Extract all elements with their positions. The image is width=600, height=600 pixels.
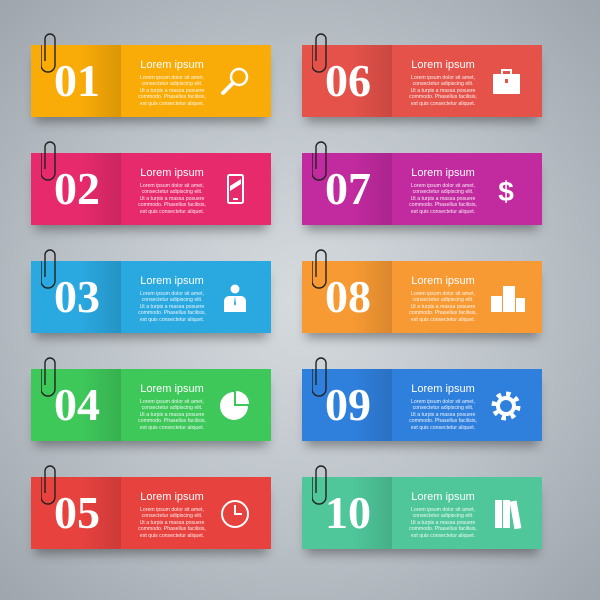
number 06: 06: [325, 55, 371, 106]
title: Lorem ipsum: [411, 383, 475, 395]
body text: Ut a turpis a massa posuere: [140, 520, 204, 526]
title: Lorem ipsum: [140, 167, 204, 179]
number 08: 08: [325, 271, 371, 322]
paperclip: [41, 465, 56, 505]
icon: clock: [221, 500, 249, 528]
title: Lorem ipsum: [411, 491, 475, 503]
body text: Lorem ipsum dolor sit amet,: [140, 183, 204, 189]
body text: Ut a turpis a massa posuere: [140, 304, 204, 310]
body text: est quis consectetur aliquet.: [140, 533, 204, 539]
card 10: [302, 477, 542, 549]
body text: consectetur adipiscing elit.: [142, 189, 202, 195]
body text: consectetur adipiscing elit.: [142, 81, 202, 87]
body text: consectetur adipiscing elit.: [142, 513, 202, 519]
icon: buildings: [491, 286, 525, 312]
title: Lorem ipsum: [411, 59, 475, 71]
body text: [409, 507, 477, 539]
body text: est quis consectetur aliquet.: [140, 101, 204, 107]
title: Lorem ipsum: [140, 59, 204, 71]
body text: commodo. Phasellus facilisis,: [138, 310, 206, 316]
number 01: 01: [54, 55, 100, 106]
paperclip: [41, 357, 56, 397]
body text: Lorem ipsum dolor sit amet,: [411, 75, 475, 81]
body text: Ut a turpis a massa posuere: [411, 88, 475, 94]
paperclip: [312, 33, 327, 73]
number 02: 02: [54, 163, 100, 214]
body text: commodo. Phasellus facilisis,: [138, 526, 206, 532]
icon: pie chart: [220, 391, 249, 420]
icon: magnifier: [220, 68, 248, 96]
body text: Ut a turpis a massa posuere: [411, 196, 475, 202]
title: Lorem ipsum: [411, 275, 475, 287]
paperclip: [312, 249, 327, 289]
card 02: [31, 153, 271, 225]
body text: commodo. Phasellus facilisis,: [409, 526, 477, 532]
body text: Lorem ipsum dolor sit amet,: [140, 291, 204, 297]
body text: [409, 75, 477, 107]
body text: commodo. Phasellus facilisis,: [409, 310, 477, 316]
card 04: [31, 369, 271, 441]
body text: commodo. Phasellus facilisis,: [138, 202, 206, 208]
body text: consectetur adipiscing elit.: [413, 189, 473, 195]
body text: est quis consectetur aliquet.: [140, 209, 204, 215]
body text: Ut a turpis a massa posuere: [140, 412, 204, 418]
body text: consectetur adipiscing elit.: [142, 405, 202, 411]
title: Lorem ipsum: [140, 491, 204, 503]
body text: est quis consectetur aliquet.: [411, 209, 475, 215]
body text: consectetur adipiscing elit.: [413, 513, 473, 519]
paperclip: [312, 357, 327, 397]
body text: [409, 183, 477, 215]
icon: gear: [492, 392, 520, 420]
paperclip: [41, 141, 56, 181]
paperclip: [312, 141, 327, 181]
body text: commodo. Phasellus facilisis,: [409, 202, 477, 208]
number 04: 04: [54, 379, 100, 430]
body text: consectetur adipiscing elit.: [413, 297, 473, 303]
body text: commodo. Phasellus facilisis,: [138, 94, 206, 100]
number 09: 09: [325, 379, 371, 430]
card 03: [31, 261, 271, 333]
number 03: 03: [54, 271, 100, 322]
body text: est quis consectetur aliquet.: [411, 533, 475, 539]
body text: Ut a turpis a massa posuere: [140, 196, 204, 202]
number 10: 10: [325, 487, 371, 538]
body text: Lorem ipsum dolor sit amet,: [411, 183, 475, 189]
icon: binders: [495, 500, 522, 530]
body text: Ut a turpis a massa posuere: [411, 412, 475, 418]
body text: [409, 291, 477, 323]
number 05: 05: [54, 487, 100, 538]
body text: [409, 399, 477, 431]
body text: consectetur adipiscing elit.: [142, 297, 202, 303]
icon: person: [224, 284, 246, 312]
icon: phone: [227, 174, 244, 204]
card 09: [302, 369, 542, 441]
body text: Lorem ipsum dolor sit amet,: [411, 507, 475, 513]
body text: Lorem ipsum dolor sit amet,: [140, 75, 204, 81]
body text: commodo. Phasellus facilisis,: [409, 418, 477, 424]
number 07: 07: [325, 163, 371, 214]
body text: Lorem ipsum dolor sit amet,: [140, 399, 204, 405]
body text: commodo. Phasellus facilisis,: [409, 94, 477, 100]
paperclip: [41, 33, 56, 73]
title: Lorem ipsum: [140, 275, 204, 287]
card 05: [31, 477, 271, 549]
body text: Lorem ipsum dolor sit amet,: [411, 291, 475, 297]
body text: est quis consectetur aliquet.: [411, 317, 475, 323]
body text: consectetur adipiscing elit.: [413, 405, 473, 411]
body text: est quis consectetur aliquet.: [411, 101, 475, 107]
card 06: [302, 45, 542, 117]
title: Lorem ipsum: [411, 167, 475, 179]
icon: briefcase: [493, 69, 520, 94]
title: Lorem ipsum: [140, 383, 204, 395]
card 07: [302, 153, 542, 225]
body text: est quis consectetur aliquet.: [140, 317, 204, 323]
body text: commodo. Phasellus facilisis,: [138, 418, 206, 424]
body text: [138, 75, 206, 107]
card 01: [31, 45, 271, 117]
paperclip: [312, 465, 327, 505]
body text: [138, 507, 206, 539]
paperclip: [41, 249, 56, 289]
card 08: [302, 261, 542, 333]
icon: dollar: $: [498, 176, 514, 207]
body text: Ut a turpis a massa posuere: [411, 304, 475, 310]
body text: [138, 399, 206, 431]
body text: [138, 183, 206, 215]
body text: Lorem ipsum dolor sit amet,: [411, 399, 475, 405]
body text: Ut a turpis a massa posuere: [411, 520, 475, 526]
body text: Lorem ipsum dolor sit amet,: [140, 507, 204, 513]
body text: est quis consectetur aliquet.: [411, 425, 475, 431]
body text: [138, 291, 206, 323]
body text: est quis consectetur aliquet.: [140, 425, 204, 431]
body text: consectetur adipiscing elit.: [413, 81, 473, 87]
body text: Ut a turpis a massa posuere: [140, 88, 204, 94]
